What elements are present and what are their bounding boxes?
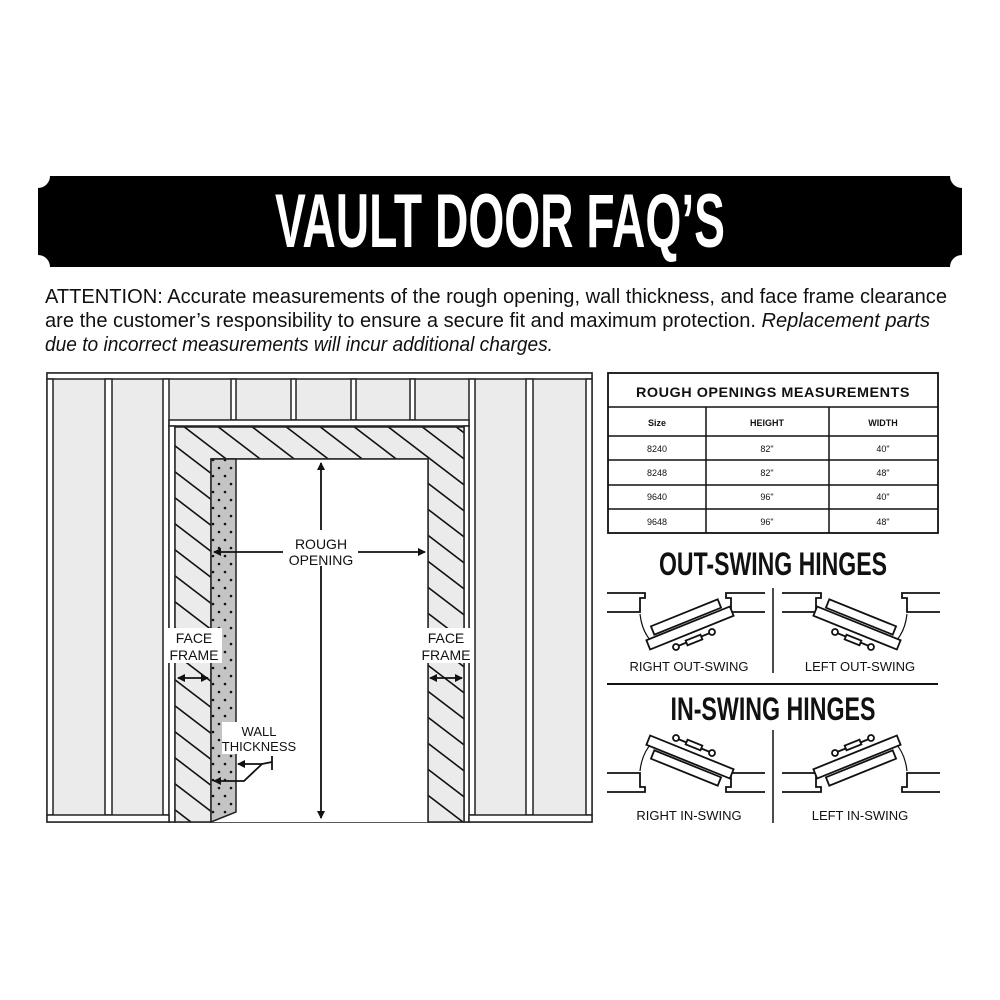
labels: in-swing: RIGHT IN-SWING	[636, 808, 742, 823]
wall diagram	[47, 373, 592, 822]
hinge diagram: left out-swing	[782, 593, 940, 650]
table: rough openings measurements: 82"	[760, 444, 774, 454]
label: face frame left: FACE	[176, 630, 212, 646]
table: rough openings measurements: WIDTH	[868, 418, 898, 428]
attention text	[45, 286, 947, 356]
label: rough opening	[285, 530, 357, 568]
attention text: due to incorrect measurements will incur additional charges.	[45, 334, 553, 356]
rough opening arrows	[214, 463, 425, 818]
table: rough openings measurements: HEIGHT	[750, 418, 784, 428]
table: rough openings measurements: 48"	[876, 468, 890, 478]
labels: out-swing	[630, 659, 915, 674]
title banner	[38, 176, 962, 267]
table: rough openings measurements: Size	[648, 418, 666, 428]
labels: in-swing	[636, 808, 908, 823]
label: face frame left	[168, 628, 222, 678]
hinge diagram: right in-swing	[607, 735, 765, 792]
attention text: ATTENTION: Accurate measurements of the rough opening, wall thickness, and face frame clearance	[45, 286, 947, 308]
table: rough openings measurements	[608, 373, 938, 533]
label: face frame left: FRAME	[170, 647, 218, 663]
label: face frame right: FRAME	[422, 647, 470, 663]
label: face frame right: FACE	[428, 630, 464, 646]
heading: in-swing hinges: IN-SWING HINGES	[670, 691, 876, 727]
table: rough openings measurements: 96"	[760, 492, 774, 502]
table: rough openings measurements: 82"	[760, 468, 774, 478]
label: wall thickness	[214, 722, 297, 781]
label: rough opening: OPENING	[289, 552, 353, 568]
heading: out-swing hinges: OUT-SWING HINGES	[659, 546, 887, 582]
table: rough openings measurements: 40"	[876, 492, 890, 502]
hinge diagram: right out-swing	[607, 593, 765, 650]
table: rough openings measurements: ROUGH OPENINGS MEASUREMENTS	[636, 384, 910, 400]
table: rough openings measurements: 9640	[647, 492, 667, 502]
table: rough openings measurements: 48"	[876, 517, 890, 527]
label: face frame right	[422, 628, 470, 678]
label: wall thickness: THICKNESS	[222, 739, 297, 754]
title banner: VAULT DOOR FAQ’S	[275, 179, 725, 264]
table: rough openings measurements: 40"	[876, 444, 890, 454]
labels: out-swing: RIGHT OUT-SWING	[630, 659, 748, 674]
labels: in-swing: LEFT IN-SWING	[812, 808, 908, 823]
label: rough opening: ROUGH	[295, 536, 347, 552]
hinge diagram: left in-swing	[782, 735, 940, 792]
table: rough openings measurements: 8240	[647, 444, 667, 454]
label: wall thickness: WALL	[242, 724, 276, 739]
labels: out-swing: LEFT OUT-SWING	[805, 659, 915, 674]
table: rough openings measurements: 8248	[647, 468, 667, 478]
table: rough openings measurements: 9648	[647, 517, 667, 527]
attention text: are the customer’s responsibility to ensure a secure fit and maximum protection. Replacement parts	[45, 310, 930, 332]
table: rough openings measurements: 96"	[760, 517, 774, 527]
